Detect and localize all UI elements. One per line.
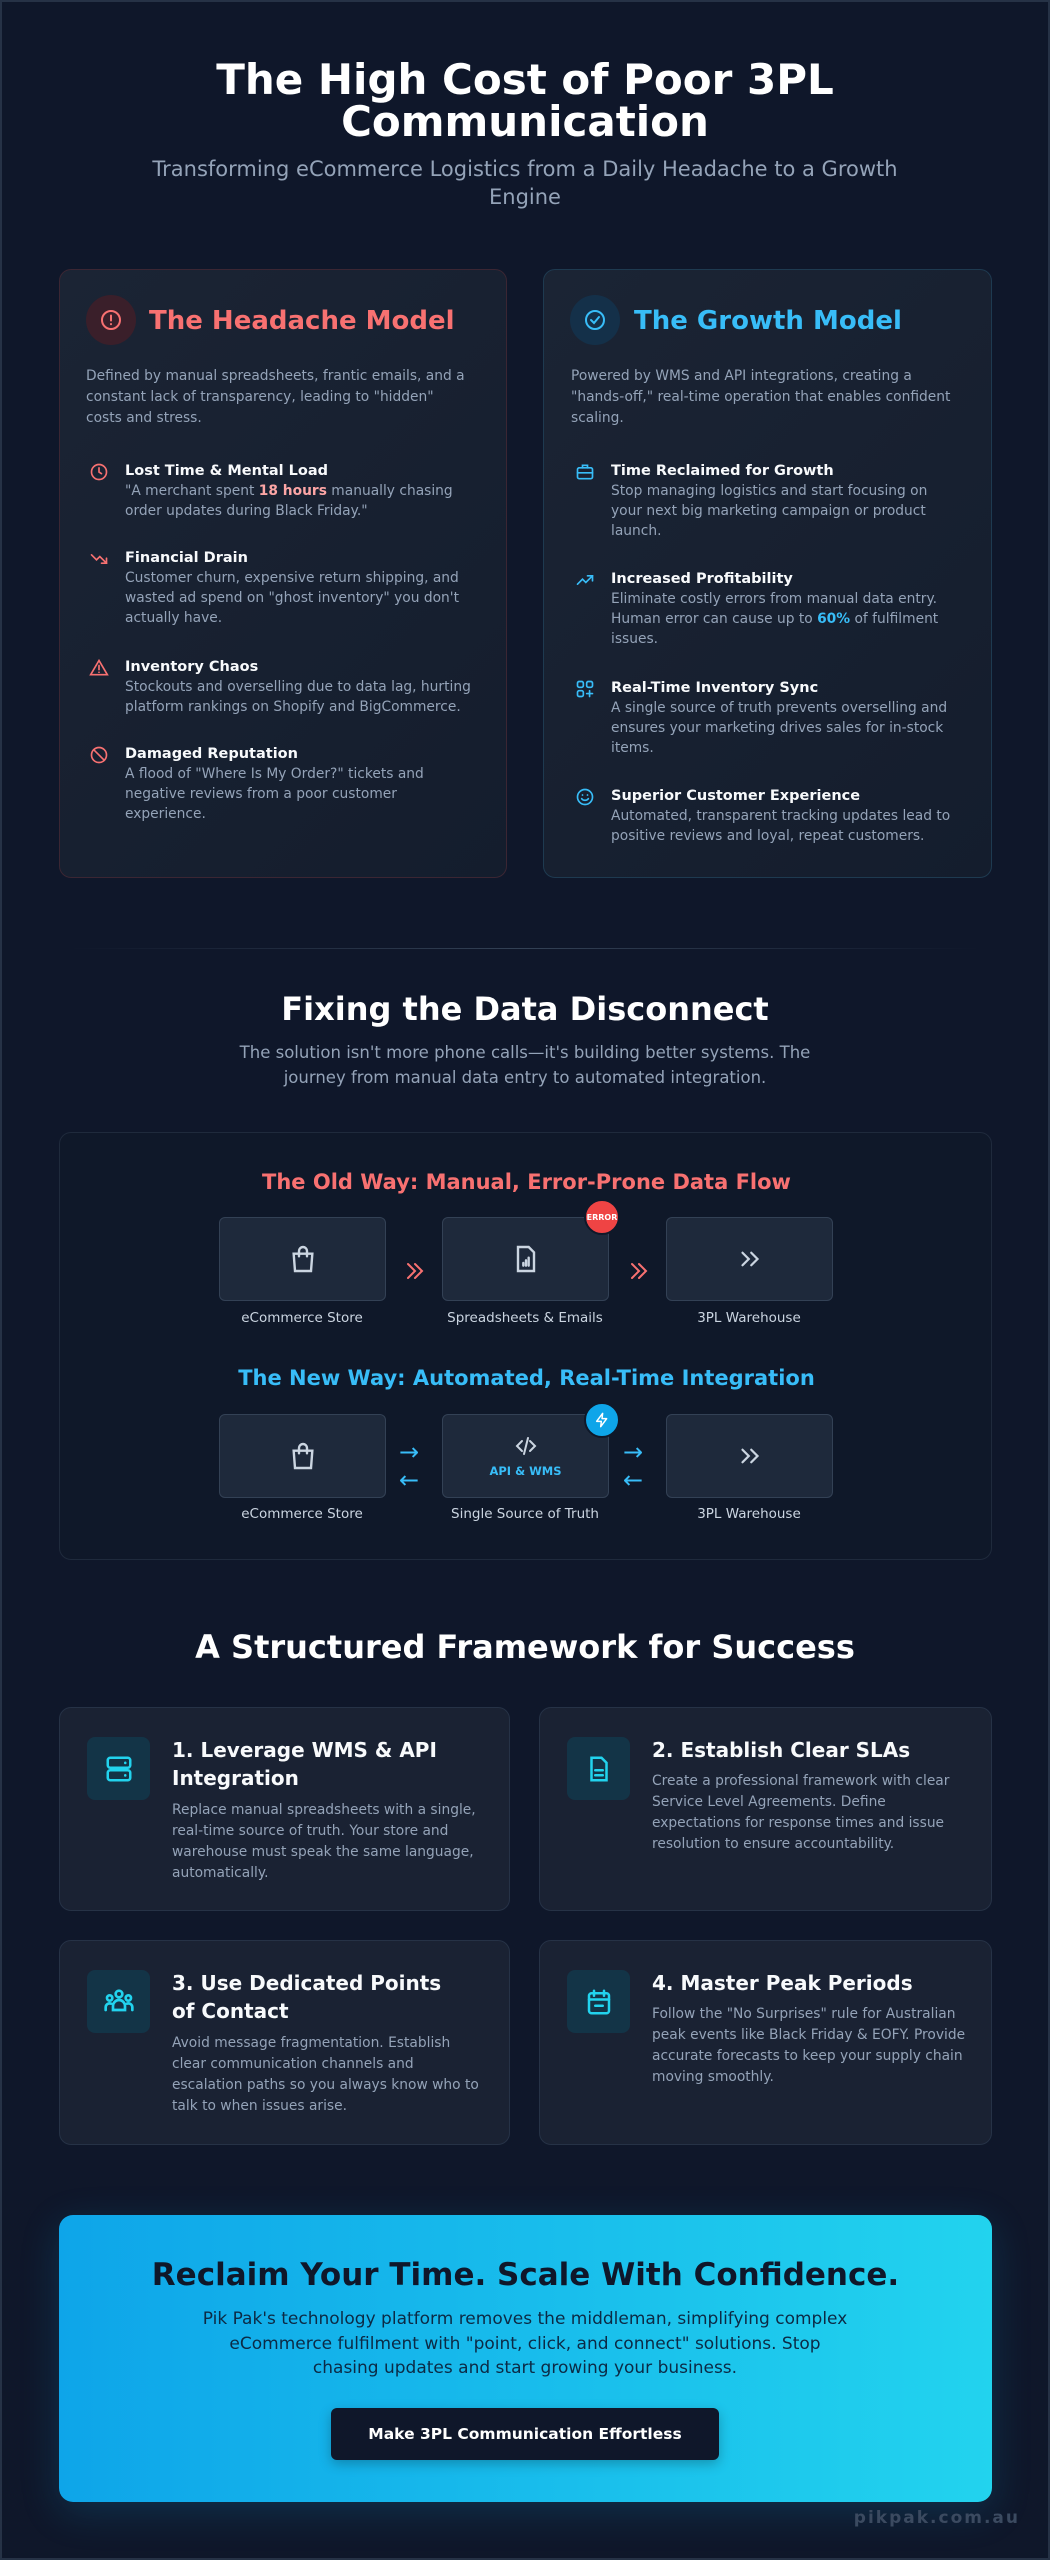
card: wms api bbox=[59, 1707, 510, 1911]
heading: old way: The Old Way: Manual, Error-Prone Data Flow bbox=[262, 1170, 791, 1194]
CTA body: Pik Pak's technology platform removes the middleman, simplifying complex eCommerce fulfilment with "point, click, and connect" solutions. Stop chasing updates and start growing your business. bbox=[203, 2309, 847, 2378]
callout: CTA bbox=[59, 2215, 992, 2502]
heading: The Headache Model bbox=[149, 306, 455, 336]
arrow: bidirectional 1: ← bbox=[399, 1466, 419, 1494]
item: inventory sync: Real-Time Inventory Sync bbox=[611, 680, 818, 696]
item: financial drain: Customer churn, expensive return shipping, and wasted ad spend on "ghost inventory" you don't actually have. bbox=[125, 570, 459, 626]
arrow: bidirectional 1 bbox=[399, 1438, 419, 1494]
box: warehouse new bbox=[666, 1414, 833, 1498]
button bbox=[331, 2408, 719, 2460]
icon: calendar bbox=[567, 1970, 630, 2033]
card: points of contact bbox=[59, 1940, 510, 2145]
title bbox=[216, 55, 834, 146]
badge: error: ERROR bbox=[587, 1212, 617, 1222]
box: api wms: API & WMS bbox=[489, 1464, 562, 1478]
label: Single Source of Truth bbox=[451, 1506, 599, 1522]
button: Make 3PL Communication Effortless bbox=[368, 2425, 682, 2443]
item: profitability: Eliminate costly errors from manual data entry. Human error can cause up to 60% of fulfilment issues. bbox=[611, 591, 938, 647]
label: 3PL Warehouse bbox=[697, 1506, 801, 1522]
label: 3PL Warehouse bbox=[697, 1310, 801, 1326]
item: time reclaimed: Stop managing logistics and start focusing on your next big marketing campaign or product launch. bbox=[611, 483, 927, 539]
badge: lightning bbox=[584, 1402, 620, 1438]
description: Powered by WMS and API integrations, creating a "hands-off," real-time operation that enables confident scaling. bbox=[571, 368, 950, 426]
arrow: red chevrons 2 bbox=[631, 1263, 648, 1279]
item: damaged reputation bbox=[90, 746, 424, 822]
heading: framework: A Structured Framework for Success bbox=[195, 1628, 855, 1666]
heading: fixing the data disconnect: Fixing the Data Disconnect bbox=[281, 990, 769, 1028]
card: slas: 2. Establish Clear SLAs bbox=[652, 1738, 910, 1762]
arrow: bidirectional 2: → bbox=[623, 1438, 643, 1466]
footer: brand: pikpak.com.au bbox=[854, 2508, 1020, 2528]
card: points of contact: Avoid message fragmentation. Establish clear communication channels and escalation paths so you always know who to talk to when issues arise. bbox=[172, 2035, 479, 2114]
heading: The Growth Model bbox=[634, 306, 902, 336]
card: points of contact: 3. Use Dedicated Points of Contact bbox=[172, 1971, 441, 2023]
arrow: bidirectional 2: ← bbox=[623, 1466, 643, 1494]
box: api wms bbox=[442, 1414, 609, 1498]
icon: document bbox=[567, 1737, 630, 1800]
subtitle: fixing: The solution isn't more phone calls—it's building better systems. The journey from manual data entry to automated integration. bbox=[240, 1043, 810, 1087]
icon: check circle bbox=[570, 295, 620, 345]
icon: team bbox=[87, 1970, 150, 2033]
title: Communication bbox=[341, 97, 709, 146]
item: damaged reputation: A flood of "Where Is My Order?" tickets and negative reviews from a poor customer experience. bbox=[125, 766, 424, 822]
label: Spreadsheets & Emails bbox=[447, 1310, 603, 1326]
item: inventory chaos: Inventory Chaos bbox=[125, 659, 258, 675]
card: peak periods: Follow the "No Surprises" rule for Australian peak events like Black Friday & EOFY. Provide accurate forecasts to keep your supply chain moving smoothly. bbox=[652, 2006, 965, 2085]
card: peak periods: 4. Master Peak Periods bbox=[652, 1971, 913, 1995]
item: damaged reputation: Damaged Reputation bbox=[125, 746, 298, 762]
card: peak periods bbox=[539, 1940, 992, 2145]
CTA heading: Reclaim Your Time. Scale With Confidence. bbox=[152, 2257, 899, 2293]
box: spreadsheets bbox=[442, 1217, 609, 1301]
subtitle: Transforming eCommerce Logistics from a Daily Headache to a Growth Engine bbox=[152, 157, 898, 209]
item: lost time bbox=[90, 463, 453, 519]
panel: growth model bbox=[543, 269, 992, 878]
box: store new bbox=[219, 1414, 386, 1498]
item: inventory chaos: Stockouts and overselling due to data lag, hurting platform rankings on Shopify and BigCommerce. bbox=[125, 679, 471, 715]
item: lost time: Lost Time & Mental Load bbox=[125, 463, 328, 479]
box: store old bbox=[219, 1217, 386, 1301]
box: warehouse old bbox=[666, 1217, 833, 1301]
heading: new way: The New Way: Automated, Real-Time Integration bbox=[238, 1366, 815, 1390]
item: customer experience: Superior Customer Experience bbox=[611, 788, 860, 804]
card: wms api: Replace manual spreadsheets with a single, real-time source of truth. Your store and warehouse must speak the same language, automatically. bbox=[172, 1802, 476, 1881]
item: financial drain: Financial Drain bbox=[125, 550, 248, 566]
item: inventory sync: A single source of truth prevents overselling and ensures your marketing drives sales for in-stock items. bbox=[611, 700, 947, 756]
item: customer experience: Automated, transparent tracking updates lead to positive reviews and loyal, repeat customers. bbox=[611, 808, 950, 844]
icon: alert circle bbox=[86, 295, 136, 345]
card: slas bbox=[539, 1707, 992, 1911]
description: Defined by manual spreadsheets, frantic emails, and a constant lack of transparency, leading to "hidden" costs and stress. bbox=[86, 368, 465, 426]
icon: server bbox=[87, 1737, 150, 1800]
panel: headache model bbox=[59, 269, 507, 878]
arrow: red chevrons 1 bbox=[407, 1263, 424, 1279]
badge: error bbox=[584, 1199, 620, 1235]
item: financial drain bbox=[90, 550, 459, 626]
item: time reclaimed bbox=[576, 463, 927, 539]
label: eCommerce Store bbox=[241, 1506, 363, 1522]
card: wms api: 1. Leverage WMS & API Integration bbox=[172, 1738, 437, 1790]
item: customer experience bbox=[576, 788, 950, 844]
item: time reclaimed: Time Reclaimed for Growth bbox=[611, 463, 834, 479]
panel: data flow bbox=[59, 1132, 992, 1560]
item: profitability bbox=[576, 571, 938, 647]
item: lost time: "A merchant spent 18 hours manually chasing order updates during Black Friday." bbox=[125, 483, 453, 519]
item: inventory chaos bbox=[89, 659, 471, 715]
title: The High Cost of Poor 3PL bbox=[216, 55, 834, 104]
arrow: bidirectional 1: → bbox=[399, 1438, 419, 1466]
arrow: bidirectional 2 bbox=[623, 1438, 643, 1494]
item: inventory sync bbox=[576, 680, 947, 756]
item: profitability: Increased Profitability bbox=[611, 571, 793, 587]
card: slas: Create a professional framework with clear Service Level Agreements. Define expectations for response times and issue resolution to ensure accountability. bbox=[652, 1773, 949, 1852]
label: eCommerce Store bbox=[241, 1310, 363, 1326]
